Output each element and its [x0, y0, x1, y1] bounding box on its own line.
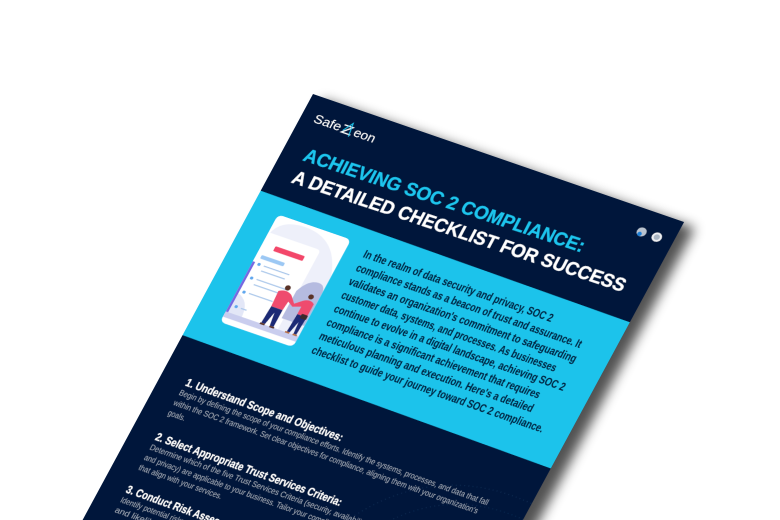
- background dot pattern: [354, 484, 532, 520]
- page shadow: [50, 100, 695, 520]
- intro text: customer data, systems, and processes. As businesses: [339, 288, 560, 375]
- intro text: [309, 248, 599, 435]
- intro text: validates an organization's commitment to safeguarding: [346, 275, 580, 365]
- intro text: compliance stands as a beacon of trust and assurance. It: [354, 261, 585, 351]
- logo: Safe: [311, 111, 345, 134]
- panel: intro band: [180, 191, 632, 468]
- icon: man: [259, 285, 294, 329]
- illustration card: [220, 215, 351, 347]
- title: A DETAILED CHECKLIST FOR SUCCESS: [288, 167, 630, 296]
- tilted flyer page: [27, 94, 684, 520]
- intro text: continue to evolve in a digital landscape, achieving SOC 2: [331, 302, 568, 394]
- intro text: meticulous planning and execution. Here's a detailed: [317, 329, 536, 415]
- intro text: In the realm of data security and privacy, SOC 2: [361, 248, 556, 325]
- icon: woman: [284, 294, 314, 336]
- title: ACHIEVING SOC 2 COMPLIANCE:: [300, 145, 589, 257]
- logo: [314, 114, 376, 143]
- item 3: [114, 485, 220, 520]
- badges icon: [636, 227, 662, 242]
- page background: [27, 94, 684, 520]
- intro text: checklist to guide your journey toward SOC 2 compliance.: [309, 343, 547, 435]
- item 1: 1. Understand Scope and Objectives:: [183, 376, 346, 444]
- item 2: that align with your services.: [137, 462, 224, 501]
- logo: eon: [351, 125, 379, 146]
- checklist: [111, 375, 514, 520]
- item 1: goals.: [166, 408, 188, 423]
- intro text: compliance is a significant achievement that requires: [324, 316, 543, 401]
